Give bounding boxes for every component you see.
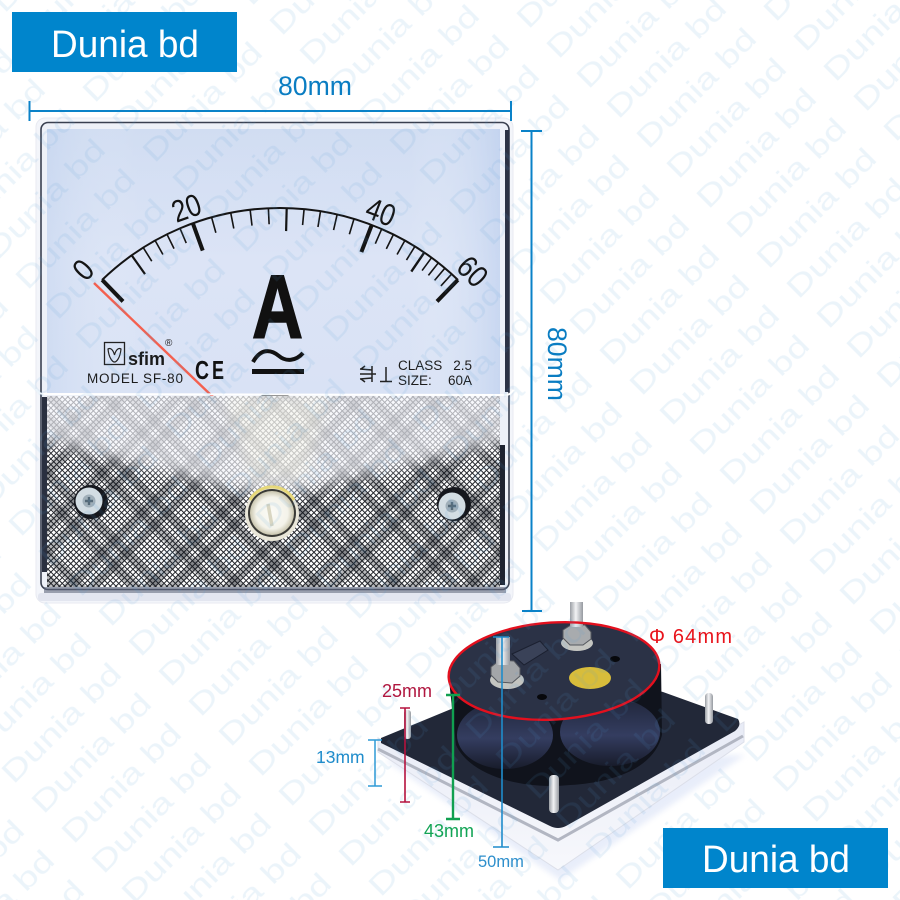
dimension: 13mm (316, 740, 382, 786)
sfim logo: sfim (128, 349, 165, 369)
thin frame (41, 122, 509, 590)
holes (610, 656, 620, 662)
scale numbers: 40 (361, 191, 401, 234)
dimension: height 80mm (521, 131, 572, 611)
CE mark: E (212, 355, 224, 385)
case edge line (378, 736, 743, 840)
scale numbers: 60 (450, 249, 495, 294)
mechanism arch (260, 396, 290, 397)
black back plate (381, 664, 739, 828)
dimension: height 80mm: 80mm (542, 327, 572, 401)
model text: MODEL SF-80 (87, 371, 183, 386)
dimension: 13mm: 13mm (316, 747, 365, 767)
class and size text (398, 358, 472, 388)
banner: bottom right (663, 828, 888, 888)
dimension: 25mm: 25mm (382, 681, 432, 701)
left dark edge lower (42, 397, 47, 572)
right screw (437, 487, 471, 521)
panel symbols (360, 366, 392, 382)
dimension: 50mm (478, 637, 524, 871)
cylinder top (446, 617, 662, 725)
class and size text: 60A (448, 373, 472, 388)
glass seam (36, 389, 513, 395)
unit letter A: A (252, 258, 303, 358)
front pin (549, 775, 559, 813)
right dark edge upper (505, 130, 510, 392)
class and size text: 2.5 (453, 358, 472, 373)
left pin (404, 710, 411, 739)
dimension: 25mm (382, 681, 432, 802)
dimension: 43mm (424, 695, 474, 841)
scale arc and ticks (102, 208, 458, 301)
AC symbol (252, 351, 304, 372)
yellow sticker (569, 667, 611, 689)
rear label recess (512, 641, 548, 665)
left terminal (490, 637, 524, 689)
patterned mirror plate (47, 396, 500, 587)
left screw (74, 485, 108, 519)
sfim logo (104, 338, 173, 369)
sfim logo: ® (165, 338, 173, 349)
dial face (47, 129, 500, 395)
scale numbers: 0 (65, 252, 101, 287)
photo: ammeter rear view (378, 602, 745, 880)
right terminal (561, 602, 593, 651)
scale numbers: 20 (167, 187, 206, 230)
red diameter outline (446, 616, 662, 726)
case soft shadow (385, 755, 745, 880)
CE mark (195, 355, 224, 385)
dimension: width 80mm: 80mm (278, 71, 352, 101)
banner: top left (12, 12, 237, 72)
cylinder lobes (457, 701, 553, 769)
right pin (705, 693, 713, 724)
dimension: width 80mm (30, 71, 511, 121)
clear outer case (36, 118, 513, 603)
CE mark: C (195, 355, 209, 385)
scale numbers (65, 187, 495, 294)
zero adjust knob (245, 487, 299, 541)
right dark edge (500, 445, 505, 585)
cylinder body (449, 664, 662, 786)
dimension: 50mm: 50mm (478, 853, 524, 871)
lower shadow band (44, 587, 506, 593)
banner: top left: Dunia bd (51, 24, 199, 66)
class and size text: SIZE: (398, 373, 432, 388)
class and size text: CLASS (398, 358, 442, 373)
needle (94, 283, 240, 425)
photo: ammeter front view (30, 118, 520, 603)
dimension: 43mm: 43mm (424, 821, 474, 841)
banner: bottom right: Dunia bd (702, 839, 850, 881)
dimension: diameter 64mm: Φ 64mm (649, 626, 732, 648)
clear case (378, 722, 744, 870)
